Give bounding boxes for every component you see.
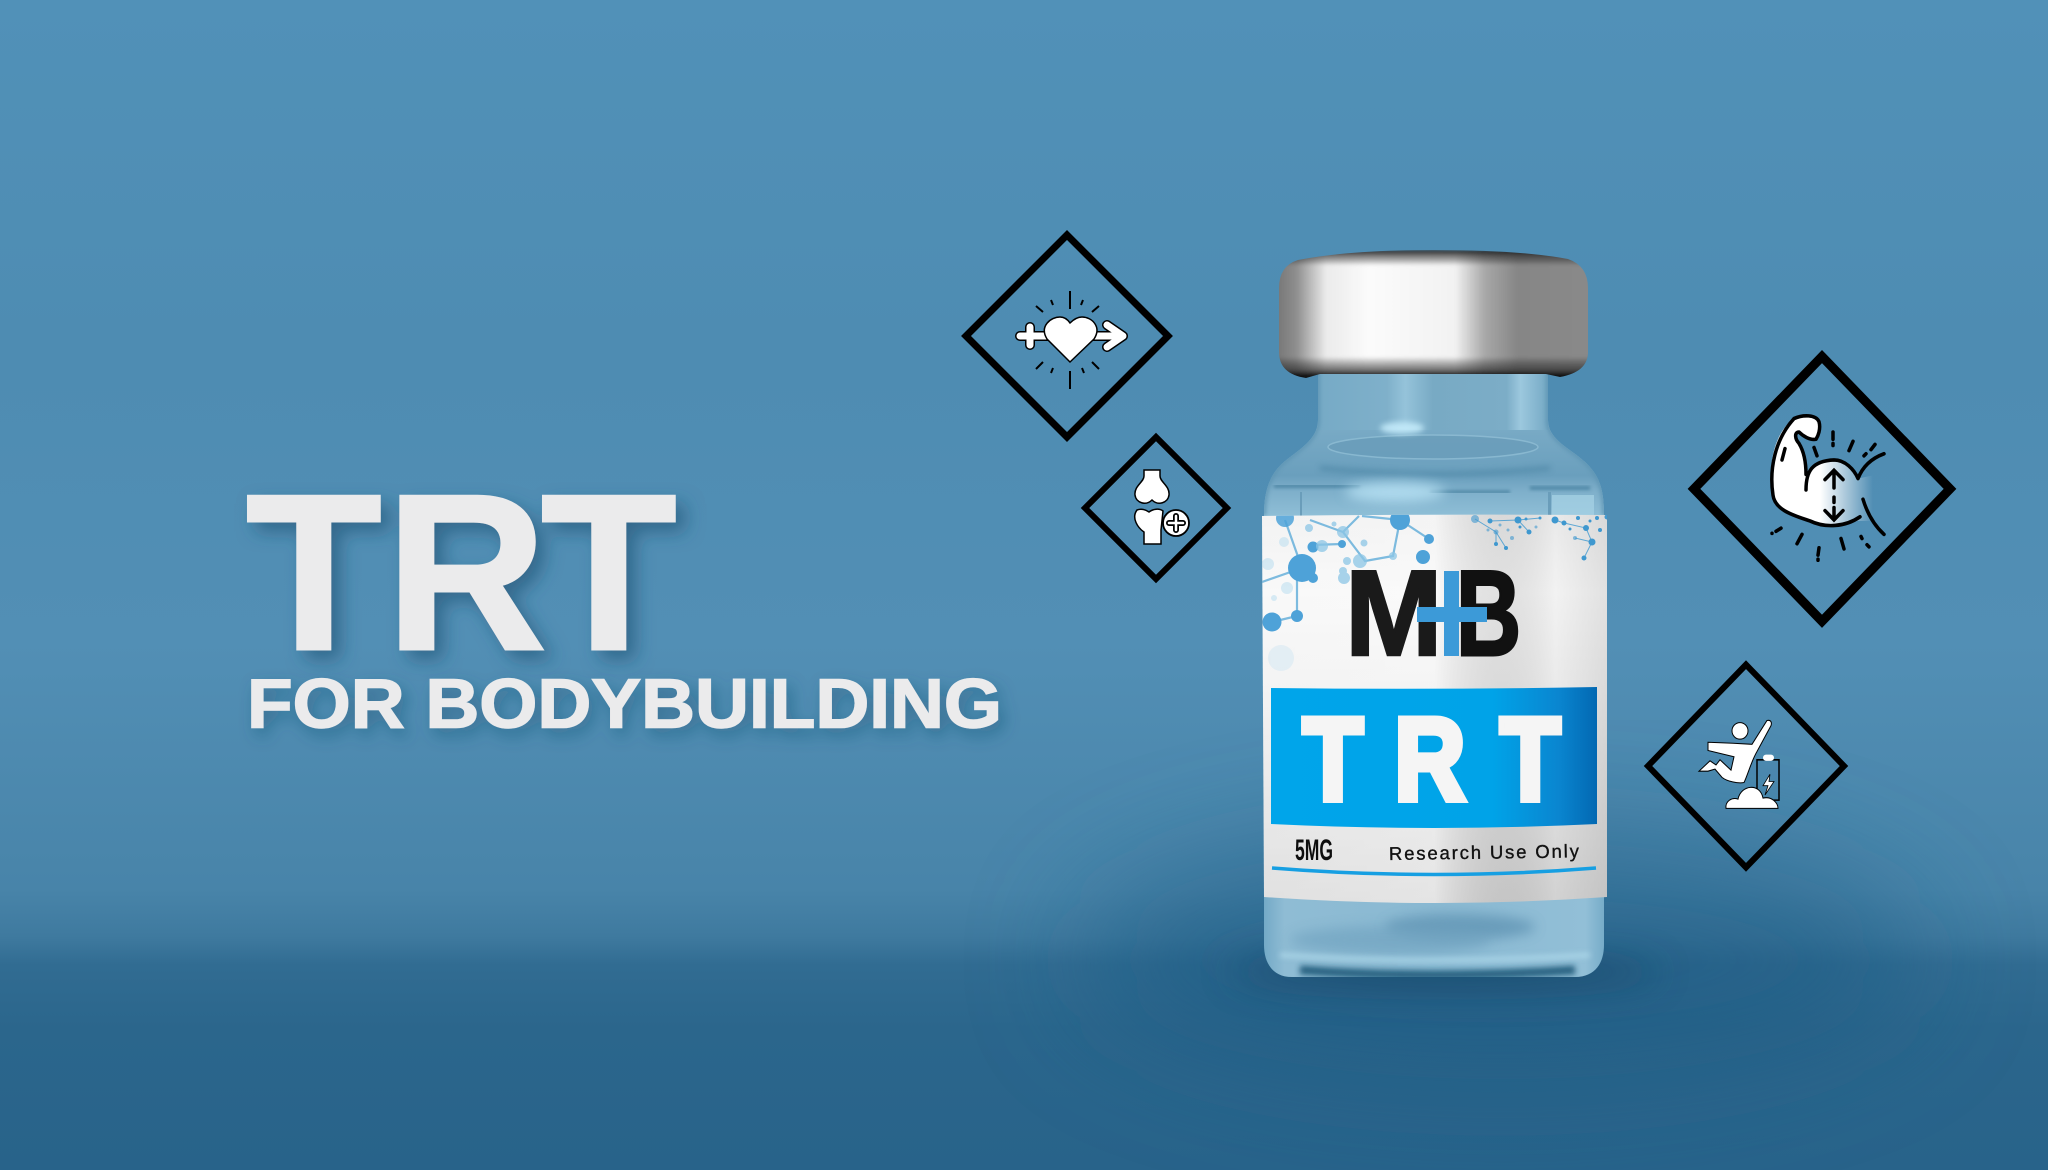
dose: 5MG: 5MG (1295, 834, 1333, 867)
vial (1260, 250, 1610, 980)
product label (1262, 509, 1610, 903)
icon: jumping person with battery in diamond (1648, 665, 1844, 867)
molecule decoration (1262, 509, 1610, 671)
icon: heart with male arrow in diamond (966, 235, 1168, 437)
logo: MB with plus: B (1456, 545, 1521, 681)
metal cap (1270, 250, 1600, 380)
glass vial body (1260, 370, 1610, 980)
research use only: Research Use Only (1389, 840, 1580, 864)
title: TRT: TRT (246, 449, 677, 697)
band text: TRT: TRT (1303, 693, 1560, 824)
icon: bone joint with plus in diamond (1085, 437, 1227, 579)
icon: flexed muscle in diamond (1694, 357, 1950, 621)
vial shadow on the floor (1230, 956, 1660, 988)
blue band (1271, 687, 1597, 828)
logo: MB with plus (1345, 545, 1521, 682)
vial base (1280, 914, 1590, 975)
label rule (1272, 868, 1596, 874)
logo: MB with plus: M (1345, 546, 1443, 682)
subtitle: FOR BODYBUILDING: FOR BODYBUILDING (247, 664, 1002, 742)
